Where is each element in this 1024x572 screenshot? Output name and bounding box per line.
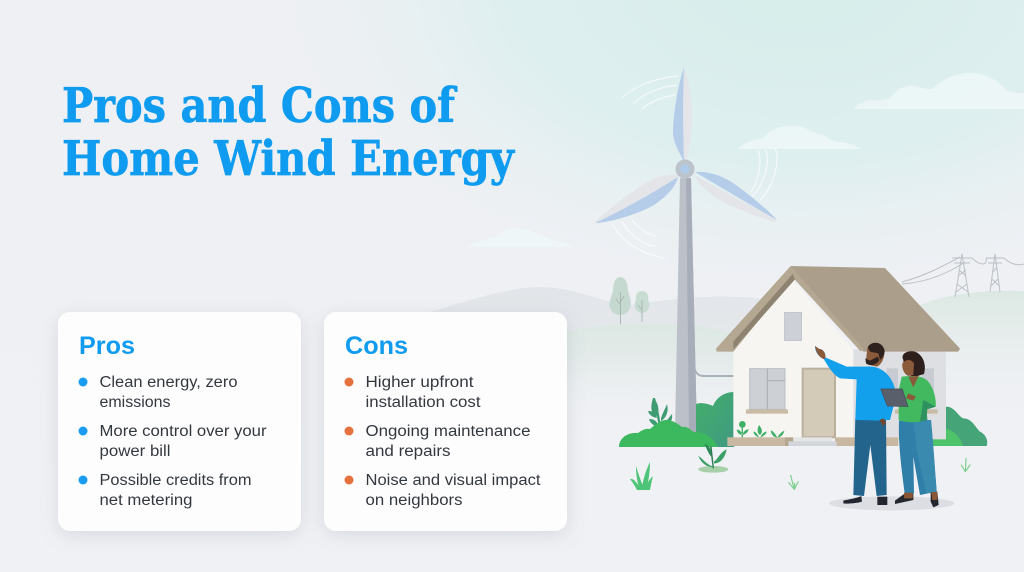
panel: cons bbox=[324, 312, 567, 531]
grass clump left bbox=[630, 462, 653, 490]
tablet bbox=[881, 389, 908, 407]
woman bbox=[895, 351, 939, 507]
power lines and pylons bbox=[902, 254, 1024, 297]
title: Home Wind Energy bbox=[62, 131, 516, 187]
side windows bbox=[887, 368, 938, 414]
foreground plant bbox=[698, 444, 728, 473]
small trees bbox=[609, 277, 649, 324]
wind arcs bbox=[612, 76, 777, 258]
tower bbox=[675, 178, 697, 432]
panel: pros bbox=[58, 312, 301, 531]
house right wall bbox=[847, 349, 946, 439]
title: Pros and Cons of bbox=[62, 78, 458, 134]
cons list: and repairs bbox=[366, 443, 451, 460]
planter sprouts bbox=[737, 421, 784, 437]
ground shadow bbox=[829, 496, 954, 510]
fern bbox=[648, 398, 672, 428]
cons list bbox=[344, 374, 541, 509]
cons heading: Cons bbox=[345, 332, 408, 360]
bush behind tower bbox=[696, 392, 734, 447]
house and garden scene bbox=[698, 266, 987, 510]
pros list: power bill bbox=[100, 443, 170, 460]
attic window bbox=[784, 312, 802, 341]
blades bbox=[673, 67, 684, 160]
pros list bbox=[78, 374, 266, 509]
cons list: on neighbors bbox=[366, 492, 463, 509]
pros list: net metering bbox=[100, 492, 192, 509]
door bbox=[803, 369, 835, 437]
wind turbine bbox=[595, 67, 777, 432]
clouds bbox=[468, 73, 1024, 247]
man bbox=[815, 343, 896, 505]
cons list: Noise and visual impact bbox=[366, 472, 541, 489]
green mound bbox=[619, 420, 718, 447]
grass tufts bbox=[789, 458, 970, 489]
rolling hills bbox=[430, 287, 1024, 430]
front window bbox=[746, 369, 788, 414]
cons list: installation cost bbox=[366, 394, 481, 411]
pros heading: Pros bbox=[79, 332, 135, 360]
bush right bbox=[946, 407, 987, 446]
cons list: Higher upfront bbox=[366, 374, 474, 391]
hub bbox=[676, 160, 694, 178]
cons list: Ongoing maintenance bbox=[366, 423, 530, 440]
pros list: Clean energy, zero bbox=[100, 374, 238, 391]
foundation and steps bbox=[727, 437, 898, 446]
pros list: Possible credits from bbox=[100, 472, 252, 489]
pros list: emissions bbox=[100, 394, 171, 411]
house front wall bbox=[733, 281, 853, 439]
title bbox=[62, 78, 516, 187]
pros list: More control over your bbox=[100, 423, 266, 440]
roof bbox=[716, 266, 960, 352]
pipe bbox=[694, 366, 734, 376]
